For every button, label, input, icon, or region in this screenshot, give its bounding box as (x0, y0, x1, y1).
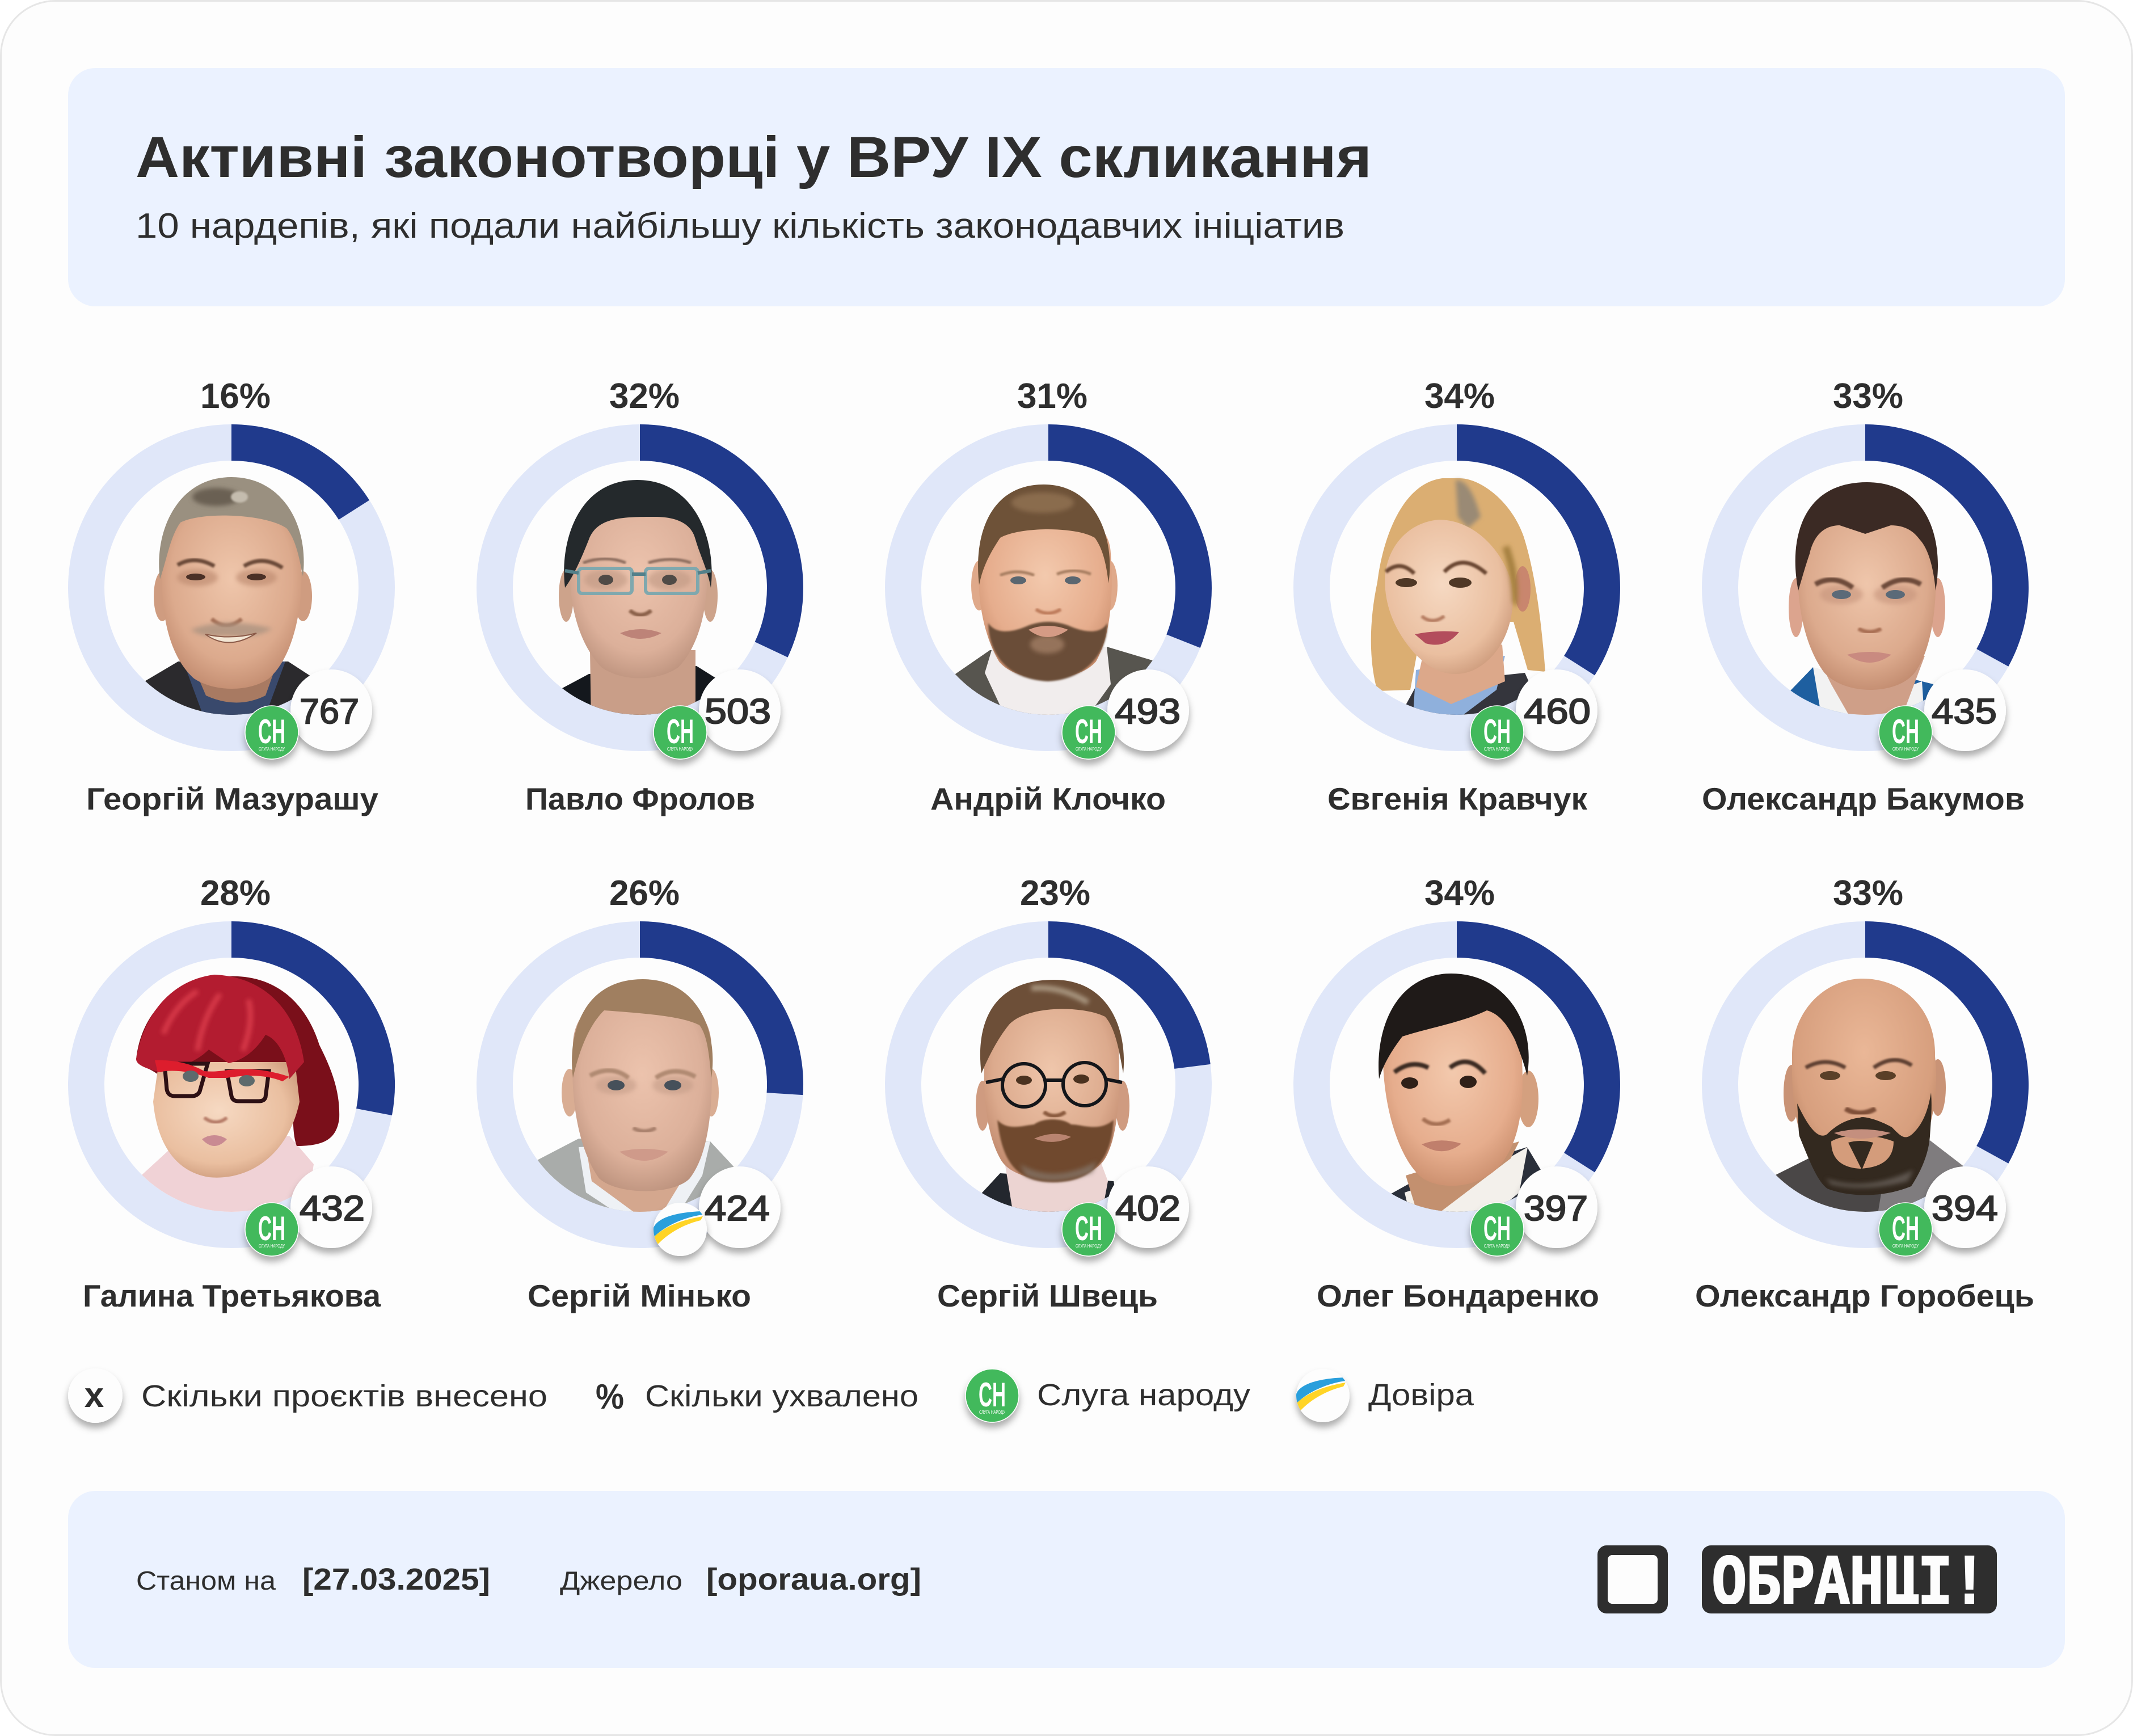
donut chart 34% (1312, 939, 1602, 1230)
profile: Андрій Клочко (903, 377, 1194, 816)
count bubble (1516, 669, 1597, 751)
name: Сергій Мінько (528, 1278, 751, 1313)
count bubble: 503 (705, 692, 771, 731)
portrait (1372, 974, 1548, 1221)
profile: Сергій Швець (903, 874, 1194, 1313)
party badge: Слуга народу (245, 706, 298, 759)
portrait (955, 484, 1153, 715)
legend icon: Слуга народу: СН (979, 1376, 1006, 1414)
name: Галина Третьякова (83, 1278, 381, 1313)
donut chart 23% (903, 939, 1194, 1230)
count bubble: 394 (1932, 1189, 1998, 1228)
portrait (963, 980, 1129, 1221)
count bubble (1107, 1166, 1189, 1248)
count bubble (1107, 669, 1189, 751)
party badge: Слуга народу (1470, 1203, 1524, 1256)
percent approved: 28% (200, 874, 271, 913)
source value: [oporaua.org] (706, 1562, 921, 1596)
party badge: Слуга народу: СЛУГА НАРОДУ (259, 1244, 285, 1249)
count bubble: 432 (300, 1189, 365, 1228)
party badge: Слуга народу (1470, 706, 1524, 759)
subtitle: 10 нардепів, які подали найбільшу кількість законодавчих ініціатив (136, 207, 1344, 246)
logo: Обранці!: ОБРАНЦІ! (1712, 1544, 1987, 1625)
percent approved: 31% (1017, 377, 1087, 416)
donut chart 34% (1312, 443, 1602, 733)
count bubble: 424 (705, 1189, 770, 1228)
party badge: Слуга народу: СЛУГА НАРОДУ (1484, 747, 1511, 752)
profile: Олександр Горобець (1695, 874, 2034, 1313)
party badge: Слуга народу: СЛУГА НАРОДУ (1076, 1244, 1102, 1249)
portrait (532, 979, 742, 1221)
count bubble: 397 (1524, 1189, 1588, 1228)
party badge: Слуга народу (1062, 706, 1115, 759)
portrait (559, 480, 718, 715)
count bubble (1924, 669, 2006, 751)
count bubble (699, 1166, 781, 1248)
profile: Георгій Мазурашу (86, 377, 378, 816)
title: Активні законотворці у ВРУ IX скликання (136, 125, 1372, 189)
donut chart 26% (495, 939, 785, 1230)
date label: Станом на (136, 1566, 276, 1595)
count bubble (699, 669, 781, 751)
count bubble (290, 669, 372, 751)
portrait (1757, 979, 1973, 1221)
donut chart 28% (86, 939, 377, 1230)
party badge: Слуга народу: СН (258, 1210, 285, 1248)
percent approved: 26% (609, 874, 680, 913)
party badge: Слуга народу: СН (1075, 1210, 1102, 1248)
donut chart 16% (86, 443, 377, 733)
donut chart 33% (1720, 939, 2010, 1230)
party badge: Слуга народу (1879, 1203, 1932, 1256)
profile: Павло Фролов (495, 377, 785, 816)
legend icon: x (68, 1368, 123, 1423)
party badge: Слуга народу: СН (667, 713, 694, 751)
percent approved: 32% (609, 377, 680, 416)
portrait (1371, 478, 1548, 724)
profile: Сергій Мінько (495, 874, 785, 1313)
date value: [27.03.2025] (302, 1562, 490, 1596)
count bubble (1924, 1166, 2006, 1248)
party badge: Слуга народу: СН (258, 713, 285, 751)
profile: Галина Третьякова (83, 874, 381, 1313)
percent approved: 33% (1833, 874, 1903, 913)
name: Олександр Горобець (1695, 1278, 2034, 1313)
legend icon: Слуга народу: СЛУГА НАРОДУ (979, 1410, 1006, 1415)
source label: Джерело (560, 1566, 682, 1595)
count bubble (290, 1166, 372, 1248)
name: Олександр Бакумов (1702, 781, 2025, 816)
logo: square mark (1597, 1545, 1668, 1613)
donut chart 32% (495, 443, 785, 733)
name: Євгенія Кравчук (1327, 781, 1587, 816)
panel: header (68, 68, 2065, 306)
profile: Олександр Бакумов (1702, 377, 2025, 816)
legend text: submitted: Скільки проєктів внесено (141, 1379, 547, 1413)
party badge: Слуга народу (654, 706, 707, 759)
legend text: Слуга народу: Слуга народу (1037, 1378, 1250, 1412)
percent approved: 23% (1020, 874, 1090, 913)
party badge: Слуга народу: СН (1483, 713, 1511, 751)
party badge: Слуга народу: СЛУГА НАРОДУ (259, 747, 285, 752)
legend text: approved: Скільки ухвалено (645, 1379, 918, 1413)
party badge: Слуга народу: СЛУГА НАРОДУ (667, 747, 694, 752)
party badge: Слуга народу (245, 1203, 298, 1256)
name: Олег Бондаренко (1317, 1278, 1599, 1313)
name: Павло Фролов (525, 781, 755, 816)
portrait (1789, 482, 1945, 715)
party badge: Слуга народу (1879, 706, 1932, 759)
legend icon: x: x (85, 1376, 104, 1415)
party badge: Слуга народу: СЛУГА НАРОДУ (1076, 747, 1102, 752)
donut chart 33% (1720, 443, 2010, 733)
name: Георгій Мазурашу (86, 781, 378, 816)
count bubble: 493 (1115, 692, 1181, 731)
count bubble: 460 (1524, 692, 1591, 731)
party badge: Слуга народу: СЛУГА НАРОДУ (1892, 747, 1919, 752)
percent approved: 16% (200, 377, 271, 416)
party badge: Слуга народу: СЛУГА НАРОДУ (1892, 1244, 1919, 1249)
party badge: Слуга народу (1062, 1203, 1115, 1256)
party badge: Слуга народу: СН (1892, 1210, 1919, 1248)
profile: Євгенія Кравчук (1312, 377, 1602, 816)
portrait (145, 477, 312, 715)
donut chart 31% (903, 443, 1194, 733)
legend icon: Слуга народу (966, 1369, 1019, 1422)
legend (68, 1368, 1474, 1423)
legend icon: percent: % (596, 1377, 624, 1417)
party badge: Слуга народу: СН (1075, 713, 1102, 751)
count bubble: 767 (300, 692, 359, 731)
legend text: Довіра: Довіра (1368, 1378, 1474, 1412)
party badge: Слуга народу: СН (1483, 1210, 1511, 1248)
profile: Олег Бондаренко (1312, 874, 1602, 1313)
portrait (135, 975, 339, 1221)
count bubble: 435 (1932, 692, 1997, 731)
party badge: Слуга народу: СН (1892, 713, 1919, 751)
count bubble (1516, 1166, 1597, 1248)
percent approved: 34% (1424, 874, 1495, 913)
legend icon: Довіра (1296, 1369, 1350, 1422)
party badge: Слуга народу: СЛУГА НАРОДУ (1484, 1244, 1511, 1249)
party badge: Довіра (654, 1203, 707, 1256)
name: Сергій Швець (937, 1278, 1158, 1313)
name: Андрій Клочко (930, 781, 1166, 816)
panel: footer (68, 1491, 2065, 1668)
percent approved: 33% (1833, 377, 1903, 416)
percent approved: 34% (1424, 377, 1495, 416)
count bubble: 402 (1115, 1189, 1181, 1228)
